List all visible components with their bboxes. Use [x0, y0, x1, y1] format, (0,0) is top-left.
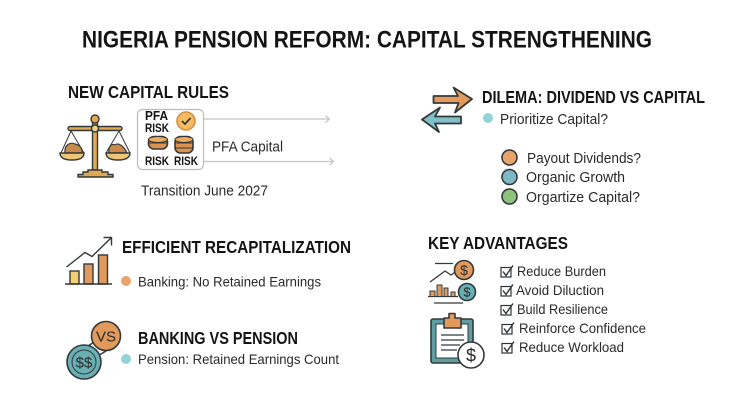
icon: coin stack large: [175, 136, 193, 153]
checklist item: reduce workload: Reduce Workload: [519, 339, 624, 355]
bullet: pension: Pension: Retained Earnings Count: [138, 351, 339, 367]
label: PFA capital: PFA Capital: [212, 138, 283, 156]
checklist item: avoid dilution: Avoid Diluction: [516, 282, 604, 298]
label: transition date: Transition June 2027: [141, 182, 268, 200]
heading: new capital rules: NEW CAPITAL RULES: [68, 82, 229, 102]
icon: coin stack small: [148, 136, 168, 149]
panel: banking vs pension: [67, 322, 339, 379]
heading: key advantages: KEY ADVANTAGES: [428, 233, 568, 253]
option: payout dividends: Payout Dividends?: [527, 150, 641, 167]
icon: VS and dollar coins: [67, 322, 120, 379]
checklist item: reinforce confidence: Reinforce Confidence: [519, 320, 646, 336]
icon: VS and dollar coins: VS: [96, 328, 116, 346]
icon: clipboard with dollar: $: [466, 346, 476, 366]
checklist item: build resilience: Build Resilience: [517, 301, 608, 317]
checklist item: reduce burden: Reduce Burden: [517, 263, 606, 279]
panel: efficient recapitalization: [65, 237, 351, 290]
heading: banking vs pension: BANKING VS PENSION: [138, 328, 298, 348]
arrow: top rule line: [197, 116, 330, 122]
PFA risk card: RISK: [174, 154, 198, 168]
icon: finance chart and coins: $: [460, 262, 468, 278]
icon: finance chart and coins: $: [463, 284, 471, 300]
icon: growth bar chart: [65, 238, 112, 284]
option: organic growth: Organic Growth: [526, 169, 625, 186]
icon: balance scale: [60, 115, 130, 177]
panel: new capital rules: [60, 82, 334, 200]
panel: key advantages: [428, 233, 646, 368]
icon: clipboard with dollar: [431, 314, 484, 368]
PFA risk card: [138, 109, 204, 170]
heading: efficient recapitalization: EFFICIENT RECAPITALIZATION: [122, 237, 351, 257]
PFA risk card: RISK: [145, 154, 169, 168]
icon: VS and dollar coins: $$: [76, 354, 93, 372]
bullet: banking: Banking: No Retained Earnings: [138, 274, 321, 290]
icon: finance chart and coins: [428, 260, 476, 303]
PFA risk card: RISK: [145, 121, 169, 135]
title: NIGERIA PENSION REFORM: CAPITAL STRENGTHENING: [82, 26, 652, 54]
PFA risk card: PFA: [145, 109, 168, 123]
bullet: prioritize capital: Prioritize Capital?: [500, 112, 608, 128]
icon: opposing arrows: [422, 88, 472, 132]
option: organize capital: Orgartize Capital?: [526, 189, 640, 206]
arrow: bottom rule line: [197, 158, 334, 165]
icon: check badge: [177, 112, 195, 130]
panel: dilemma: [422, 87, 705, 206]
